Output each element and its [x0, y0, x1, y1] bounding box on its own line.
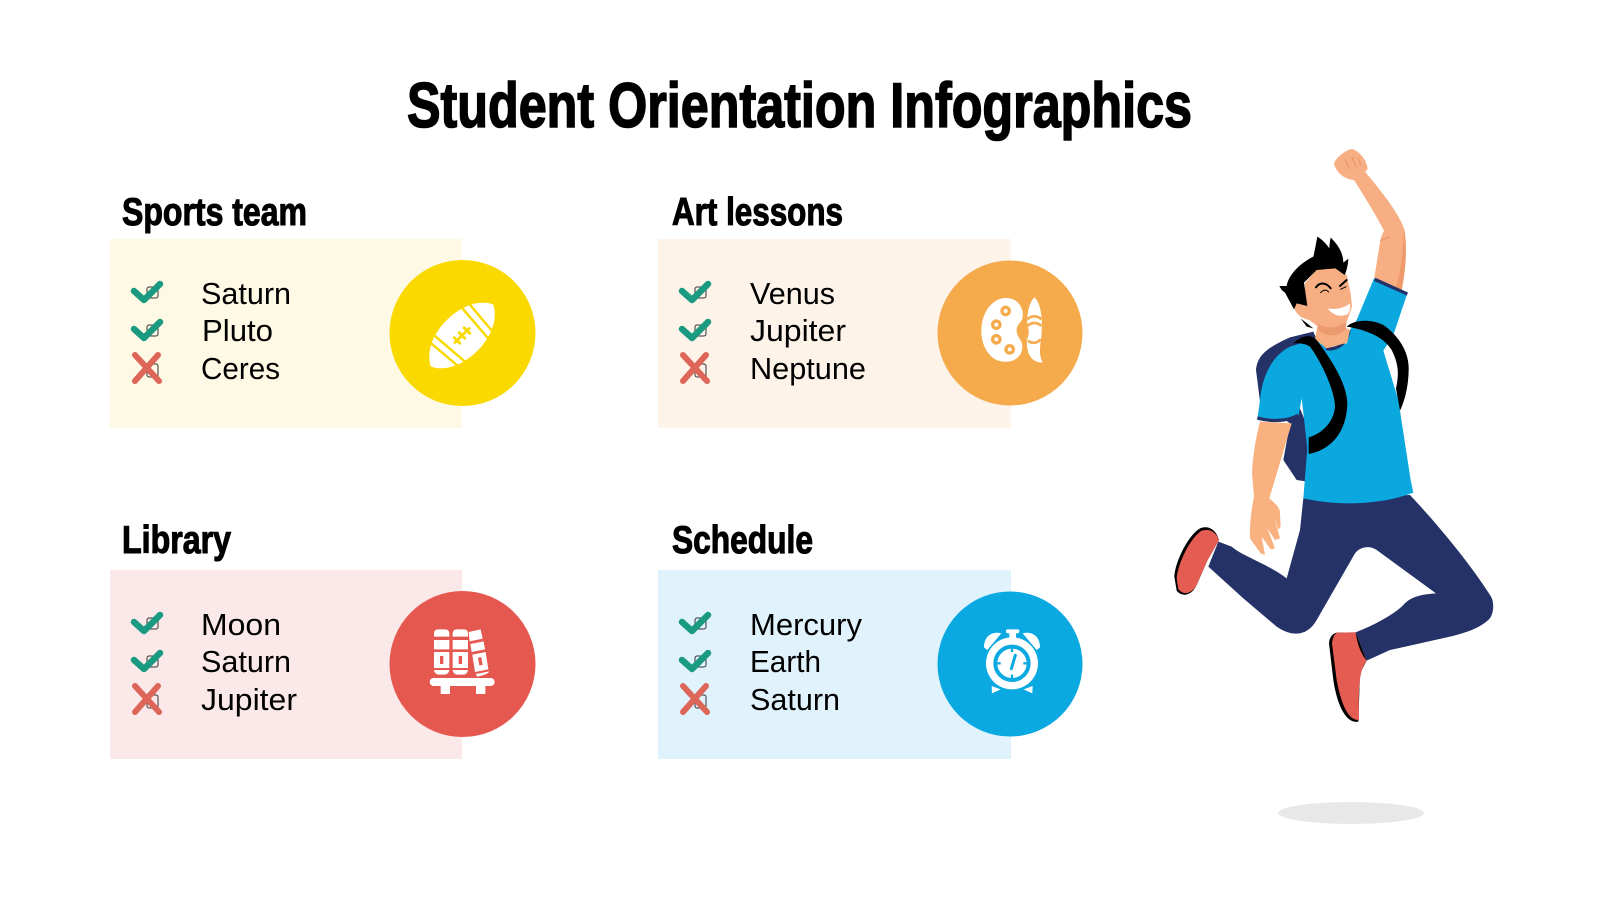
raised arm	[1334, 149, 1406, 290]
list: library	[201, 608, 297, 717]
heading: sports team: Sports team	[122, 191, 307, 234]
list: sports team: Saturn	[201, 277, 291, 311]
panel: library	[110, 519, 536, 759]
ground shadow	[1278, 802, 1424, 824]
list: schedule: Mercury	[750, 608, 863, 642]
heading: library: Library	[122, 519, 231, 562]
status icons: schedule	[682, 615, 708, 712]
left shoe	[1174, 527, 1219, 595]
list: schedule	[750, 608, 863, 717]
panel background: art lessons	[658, 239, 1011, 428]
panel: schedule	[658, 519, 1082, 759]
face details	[1328, 303, 1350, 316]
icon: books on shelf	[390, 591, 536, 737]
head	[1279, 237, 1352, 348]
list: schedule: Saturn	[750, 683, 840, 717]
left arm and hand	[1250, 422, 1292, 555]
heading: schedule: Schedule	[672, 519, 813, 562]
illustration: jumping student	[1174, 149, 1493, 824]
icon: football	[390, 260, 536, 406]
backpack	[1256, 332, 1318, 482]
icon: palette and brush	[938, 260, 1082, 406]
shirt	[1257, 278, 1413, 503]
backpack straps	[1293, 321, 1409, 454]
sleeve and collar trims	[1257, 279, 1407, 420]
list: schedule: Earth	[750, 645, 821, 679]
status icons: sports team	[134, 284, 160, 381]
panel: art lessons	[658, 191, 1082, 428]
right shoe	[1329, 632, 1367, 722]
title: Student Orientation Infographics	[407, 71, 1192, 141]
list: art lessons: Venus	[750, 277, 835, 311]
list: library: Saturn	[201, 645, 291, 679]
pants	[1208, 495, 1493, 661]
list: art lessons: Neptune	[750, 352, 866, 386]
list: sports team: Ceres	[201, 352, 280, 386]
panel background: sports team	[110, 239, 462, 428]
list: art lessons: Jupiter	[750, 314, 846, 348]
status icons: library	[134, 615, 160, 712]
list: library: Jupiter	[201, 683, 297, 717]
panel: sports team	[110, 191, 536, 428]
hair	[1279, 237, 1348, 328]
panel background: schedule	[658, 570, 1011, 759]
list: art lessons	[750, 277, 866, 386]
list: library: Moon	[201, 608, 281, 642]
list: sports team: Pluto	[202, 314, 273, 348]
list: sports team	[201, 277, 291, 386]
status icons: art lessons	[682, 284, 708, 381]
heading: art lessons: Art lessons	[672, 191, 843, 234]
icon: alarm clock	[938, 592, 1082, 736]
panel background: library	[110, 570, 462, 759]
